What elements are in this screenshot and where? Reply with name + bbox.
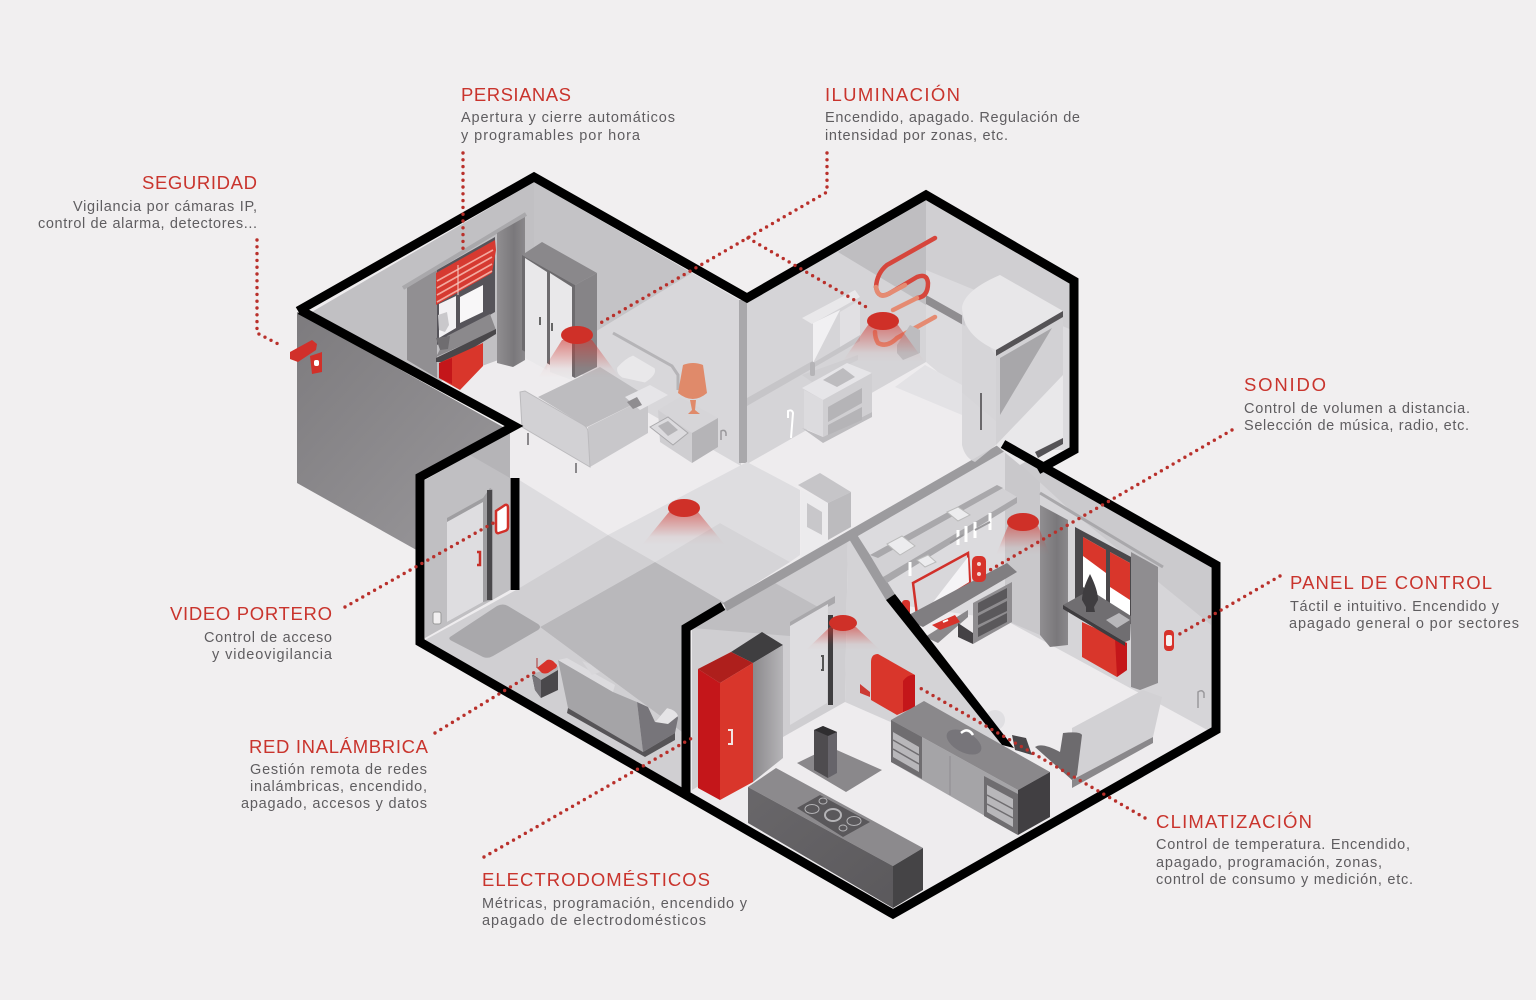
label: seguridad — [38, 172, 257, 232]
dotted leaders — [257, 153, 1280, 857]
icon: security camera — [290, 340, 322, 374]
label: climatización: Control de temperatura. Encendido, — [1156, 837, 1410, 853]
hall sofa — [558, 658, 678, 757]
label: sonido: Control de volumen a distancia. — [1244, 401, 1470, 417]
label: persianas: PERSIANAS — [461, 84, 571, 105]
living sofa — [985, 690, 1204, 788]
fridge — [698, 632, 783, 800]
exterior wall — [297, 312, 512, 552]
shower — [962, 275, 1063, 465]
icon: sound speaker — [972, 556, 986, 582]
label: panel de control — [1289, 572, 1519, 632]
label: panel de control: Táctil e intuitivo. Encendido y — [1290, 599, 1500, 615]
bedroom radiator — [439, 343, 483, 390]
desk with drawers — [903, 563, 1017, 644]
label: iluminación: ILUMINACIÓN — [825, 84, 960, 105]
wireless router — [532, 658, 558, 698]
label: sonido: Selección de música, radio, etc. — [1244, 418, 1469, 434]
label: electrodomésticos — [482, 869, 748, 929]
label: climatización: CLIMATIZACIÓN — [1156, 811, 1312, 832]
label: video portero — [170, 603, 333, 663]
bedroom window with blind — [403, 214, 526, 378]
label: persianas — [461, 84, 675, 144]
central utility column — [798, 473, 851, 558]
night stand and lamp — [650, 363, 726, 463]
bed — [520, 333, 678, 473]
label: seguridad: SEGURIDAD — [142, 172, 257, 193]
entrance mat — [449, 604, 540, 658]
label: climatización — [1156, 811, 1413, 888]
towel rail — [875, 238, 935, 360]
bathroom walls — [747, 200, 1072, 464]
label: video portero: y videovigilancia — [212, 647, 333, 663]
living room walls — [853, 450, 1211, 775]
label: iluminación: intensidad por zonas, etc. — [825, 128, 1008, 144]
ceiling light: kitchen — [806, 615, 880, 650]
kitchen island with cooktop — [748, 768, 923, 908]
label: red inalámbrica: Gestión remota de redes — [250, 762, 427, 778]
lamp — [678, 363, 707, 414]
kitchen counter with sink — [891, 701, 1050, 835]
label: sonido — [1244, 374, 1470, 434]
vase — [1082, 574, 1098, 612]
hall wall and door — [425, 432, 510, 638]
wall top bands — [723, 442, 1005, 611]
label: video portero: Control de acceso — [204, 630, 332, 646]
label: seguridad: control de alarma, detectores... — [38, 216, 257, 232]
kitchen heater — [860, 654, 915, 715]
label: red inalámbrica — [241, 736, 429, 812]
label: climatización: control de consumo y medición, etc. — [1156, 872, 1413, 888]
ceiling light: hall — [642, 499, 725, 545]
icon: control panel — [1164, 630, 1174, 651]
label: climatización: apagado, programación, zonas, — [1156, 855, 1382, 871]
living room shelves — [870, 485, 1017, 583]
label: persianas: Apertura y cierre automáticos — [461, 110, 675, 126]
kitchen hood — [797, 726, 882, 792]
label: red inalámbrica: inalámbricas, encendido, — [250, 779, 427, 795]
label: iluminación: Encendido, apagado. Regulación de — [825, 110, 1080, 126]
floor plan base — [303, 180, 1214, 912]
television — [902, 553, 970, 615]
blind — [436, 240, 496, 305]
ceiling light: bathroom — [842, 312, 925, 362]
bedroom walls — [310, 182, 747, 466]
icon: video door phone — [477, 505, 508, 565]
central floor shading — [425, 462, 800, 790]
label: panel de control: PANEL DE CONTROL — [1290, 572, 1492, 593]
label: panel de control: apagado general o por sectores — [1289, 616, 1519, 632]
living room window — [1040, 493, 1163, 690]
label: iluminación — [825, 84, 1080, 144]
kitchen walls — [692, 537, 1008, 790]
black walls — [298, 177, 1216, 914]
label: video portero: VIDEO PORTERO — [170, 603, 332, 624]
label: electrodomésticos: ELECTRODOMÉSTICOS — [482, 869, 710, 890]
label: electrodomésticos: Métricas, programación, encendido y — [482, 896, 748, 912]
ceiling light: living room — [996, 513, 1050, 555]
wardrobe — [522, 242, 597, 380]
bathroom vanity — [788, 290, 872, 443]
label: red inalámbrica: apagado, accesos y datos — [241, 796, 427, 812]
label: persianas: y programables por hora — [461, 128, 641, 144]
label: seguridad: Vigilancia por cámaras IP, — [73, 199, 257, 215]
label: red inalámbrica: RED INALÁMBRICA — [249, 736, 429, 757]
label: electrodomésticos: apagado de electrodomésticos — [482, 913, 706, 929]
ceiling light: bedroom — [538, 326, 620, 378]
label: sonido: SONIDO — [1244, 374, 1326, 395]
